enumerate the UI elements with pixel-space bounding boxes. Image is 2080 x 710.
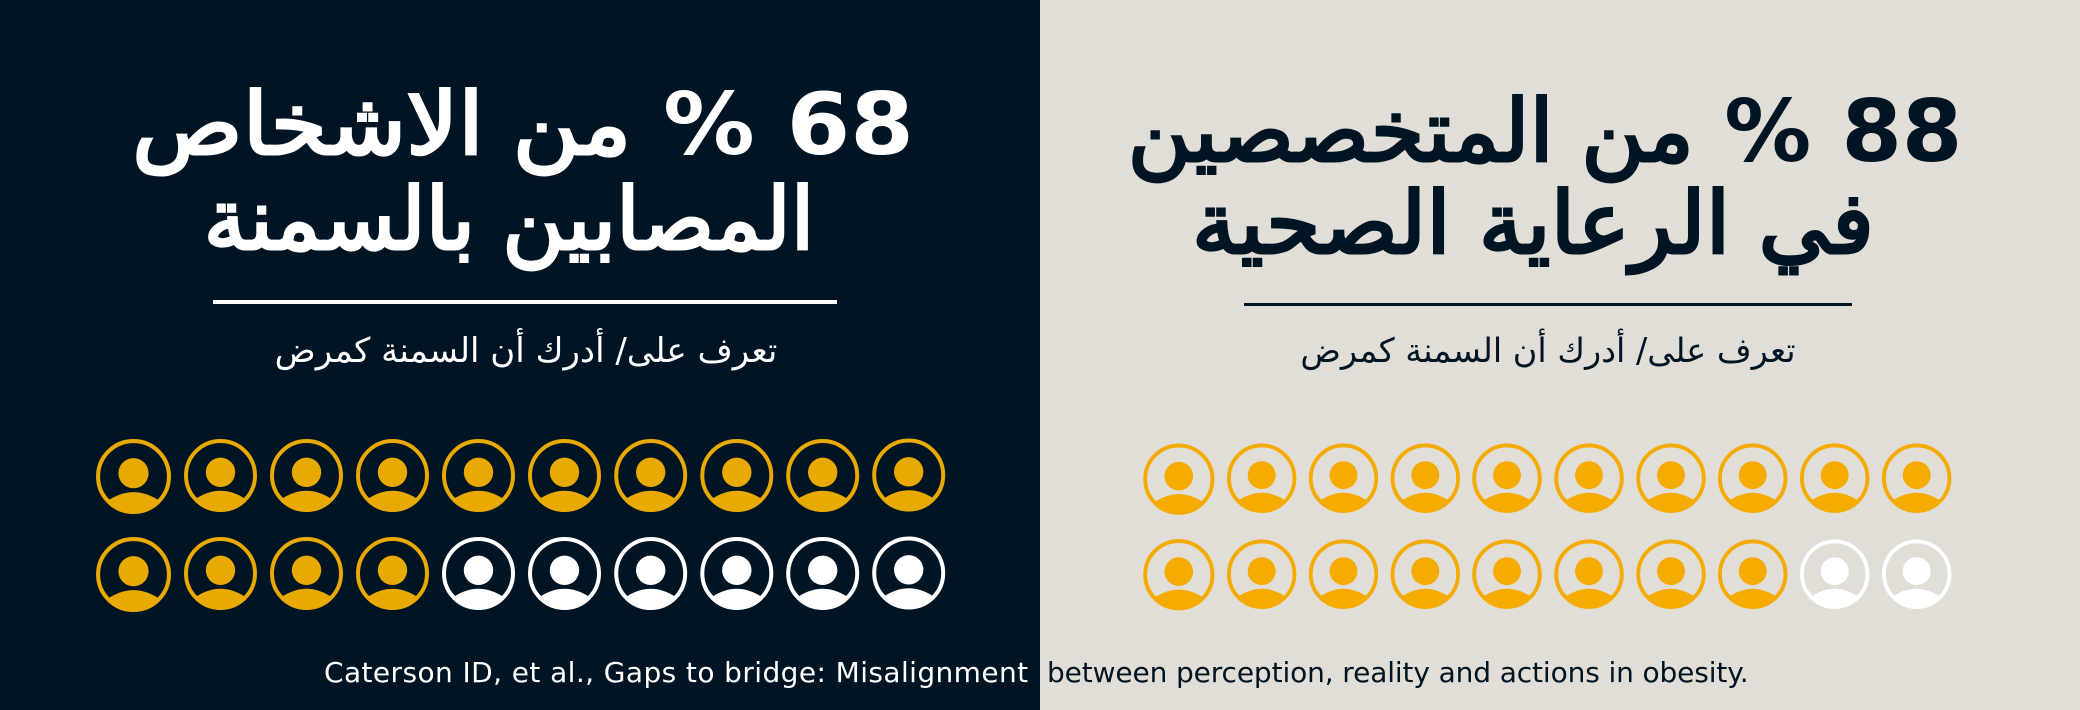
icon: person 5 <box>1474 445 1540 513</box>
icon grid: left <box>98 440 943 612</box>
subheading: right: تعرف على/ أدرك أن السمنة كمرض <box>1300 331 1796 370</box>
icon: person 7 <box>616 441 685 512</box>
icon grid: right <box>1145 445 1949 610</box>
heading: healthcare professionals: في الرعاية الصحية <box>1191 174 1874 274</box>
icon: person 9 <box>788 441 857 512</box>
icon: person 6 <box>530 441 599 512</box>
icon: person 16 <box>530 539 599 610</box>
icon: person 9 <box>1802 445 1867 513</box>
icon: person 10 <box>874 440 943 511</box>
icon: person 17 <box>1638 541 1704 609</box>
icon: person 19 <box>1802 541 1867 609</box>
icon: person 1 <box>98 441 169 514</box>
icon: person 18 <box>1720 541 1785 609</box>
citation: right part: between perception, reality and actions in obesity. <box>1047 656 1749 689</box>
icon: person 1 <box>1145 446 1212 515</box>
citation: left part: Caterson ID, et al., Gaps to bridge: Misalignment <box>324 656 1029 689</box>
icon: person 16 <box>1556 541 1622 609</box>
icon: person 18 <box>702 539 771 610</box>
icon: person 4 <box>1393 445 1458 513</box>
icon: person 8 <box>1720 445 1785 513</box>
icon: person 2 <box>1229 445 1294 513</box>
rule: right <box>1244 303 1852 306</box>
icon: person 13 <box>272 539 341 610</box>
heading: people with obesity: المصابين بالسمنة <box>204 170 814 270</box>
icon: person 6 <box>1556 445 1622 513</box>
icon: person 3 <box>1311 445 1376 513</box>
icon: person 15 <box>444 539 513 610</box>
icon: person 14 <box>1393 541 1458 609</box>
icon: person 17 <box>616 539 685 610</box>
heading: healthcare professionals <box>1128 82 1962 276</box>
icon: person 19 <box>788 539 857 610</box>
icon: person 10 <box>1884 445 1949 513</box>
icon: person 2 <box>186 441 255 512</box>
icon: person 11 <box>1145 541 1212 610</box>
icon: person 7 <box>1638 445 1704 513</box>
icon: person 20 <box>874 538 943 609</box>
subheading: left: تعرف على/ أدرك أن السمنة كمرض <box>275 331 777 371</box>
icon: person 3 <box>272 441 341 512</box>
icon: person 4 <box>358 441 427 512</box>
rule: left <box>213 300 837 304</box>
heading: healthcare professionals: 88 % من المتخصصين <box>1128 82 1962 182</box>
panel: people with obesity background <box>0 0 1040 710</box>
icon: person 8 <box>702 441 771 512</box>
icon: person 12 <box>186 539 255 610</box>
heading: people with obesity: 68 % من الاشخاص <box>132 75 913 175</box>
icon: person 20 <box>1884 541 1949 609</box>
icon: person 12 <box>1229 541 1294 609</box>
heading: people with obesity <box>132 75 913 272</box>
icon: person 13 <box>1311 541 1376 609</box>
icon: person 14 <box>358 539 427 610</box>
icon: person 11 <box>98 539 169 612</box>
icon: person 15 <box>1474 541 1540 609</box>
panel: healthcare professionals background <box>1040 0 2080 710</box>
icon: person 5 <box>444 441 513 512</box>
